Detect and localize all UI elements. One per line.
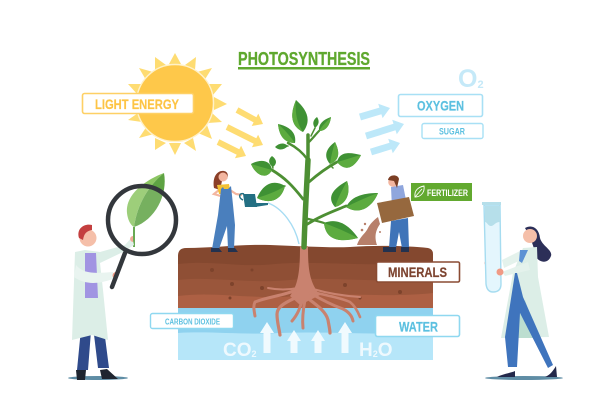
lab coat bbox=[501, 247, 549, 338]
leaves highlight bbox=[251, 100, 378, 240]
formula: H2O: H bbox=[359, 340, 373, 361]
coat lining bbox=[512, 300, 538, 338]
arrows: oxygen output bbox=[359, 104, 404, 155]
label: fertilizer bbox=[411, 183, 472, 201]
soil bbox=[178, 245, 433, 308]
leaf under magnifier bbox=[127, 173, 165, 247]
trousers bbox=[389, 218, 409, 248]
soil pile bbox=[357, 217, 381, 245]
roots bbox=[254, 246, 360, 335]
hair bbox=[78, 225, 92, 240]
formula: H2O: 2 bbox=[373, 349, 378, 359]
label: oxygen O2: O bbox=[458, 65, 477, 93]
test tube bbox=[482, 202, 501, 292]
water stream bbox=[268, 203, 299, 244]
title: PHOTOSYNTHESIS bbox=[238, 49, 370, 69]
label: oxygen O2: 2 bbox=[477, 79, 484, 91]
shoes bbox=[211, 248, 238, 252]
purple shirt bbox=[85, 253, 98, 298]
overalls bbox=[212, 186, 235, 249]
character: gardener woman bbox=[211, 171, 242, 252]
hair bbox=[525, 226, 551, 262]
leaves dark bbox=[251, 100, 378, 240]
label: minerals: MINERALS bbox=[388, 264, 447, 280]
shoes bbox=[76, 369, 118, 380]
hair bbox=[214, 171, 228, 190]
formula: CO2: CO bbox=[223, 340, 252, 361]
label: sugar bbox=[422, 124, 483, 138]
shirt bbox=[391, 185, 407, 208]
hands bbox=[113, 236, 133, 279]
stem and branches bbox=[272, 128, 346, 247]
character: gardener man bbox=[377, 175, 414, 252]
coat arm bbox=[74, 265, 113, 283]
back hand bbox=[484, 260, 490, 266]
water layer bbox=[178, 308, 433, 360]
arrows: sunlight bbox=[217, 107, 263, 158]
shoes bbox=[383, 247, 409, 252]
label: oxygen O2 bbox=[398, 65, 484, 116]
label: carbon dioxide bbox=[150, 314, 234, 328]
label: water bbox=[376, 316, 460, 336]
plant bbox=[251, 100, 378, 247]
sun with rays bbox=[128, 53, 227, 155]
head bbox=[523, 229, 537, 243]
front hand bbox=[496, 268, 504, 276]
shadow bbox=[68, 376, 128, 380]
icon: watering can bbox=[240, 194, 268, 207]
blouse bbox=[519, 250, 528, 263]
shoes bbox=[497, 366, 557, 377]
label: light energy: LIGHT ENERGY bbox=[95, 96, 180, 112]
head bbox=[80, 230, 96, 246]
label: carbon dioxide: CARBON DIOXIDE bbox=[165, 318, 221, 326]
head bbox=[218, 172, 228, 182]
icon: magnifying glass bbox=[108, 186, 176, 287]
coat arms bbox=[502, 250, 530, 276]
label: fertilizer: FERTILIZER bbox=[427, 188, 468, 199]
trousers bbox=[505, 273, 553, 368]
formula: H2O: O bbox=[378, 340, 393, 361]
label: water: WATER bbox=[399, 318, 438, 334]
arms bbox=[214, 190, 242, 197]
character: scientist with test tube bbox=[484, 226, 563, 380]
label: oxygen O2: OXYGEN bbox=[417, 98, 464, 114]
label: light energy bbox=[82, 94, 194, 114]
shadow bbox=[485, 376, 563, 380]
character: scientist with magnifier bbox=[68, 173, 165, 380]
lab coat bbox=[72, 237, 134, 340]
formula: CO2: 2 bbox=[252, 349, 257, 359]
arrows: upward absorption bbox=[260, 322, 352, 353]
label: sugar: SUGAR bbox=[439, 126, 465, 136]
trousers bbox=[77, 298, 109, 370]
shirt bbox=[217, 184, 231, 194]
box bbox=[377, 197, 414, 223]
label: minerals bbox=[376, 262, 460, 282]
hair and head bbox=[388, 177, 398, 187]
